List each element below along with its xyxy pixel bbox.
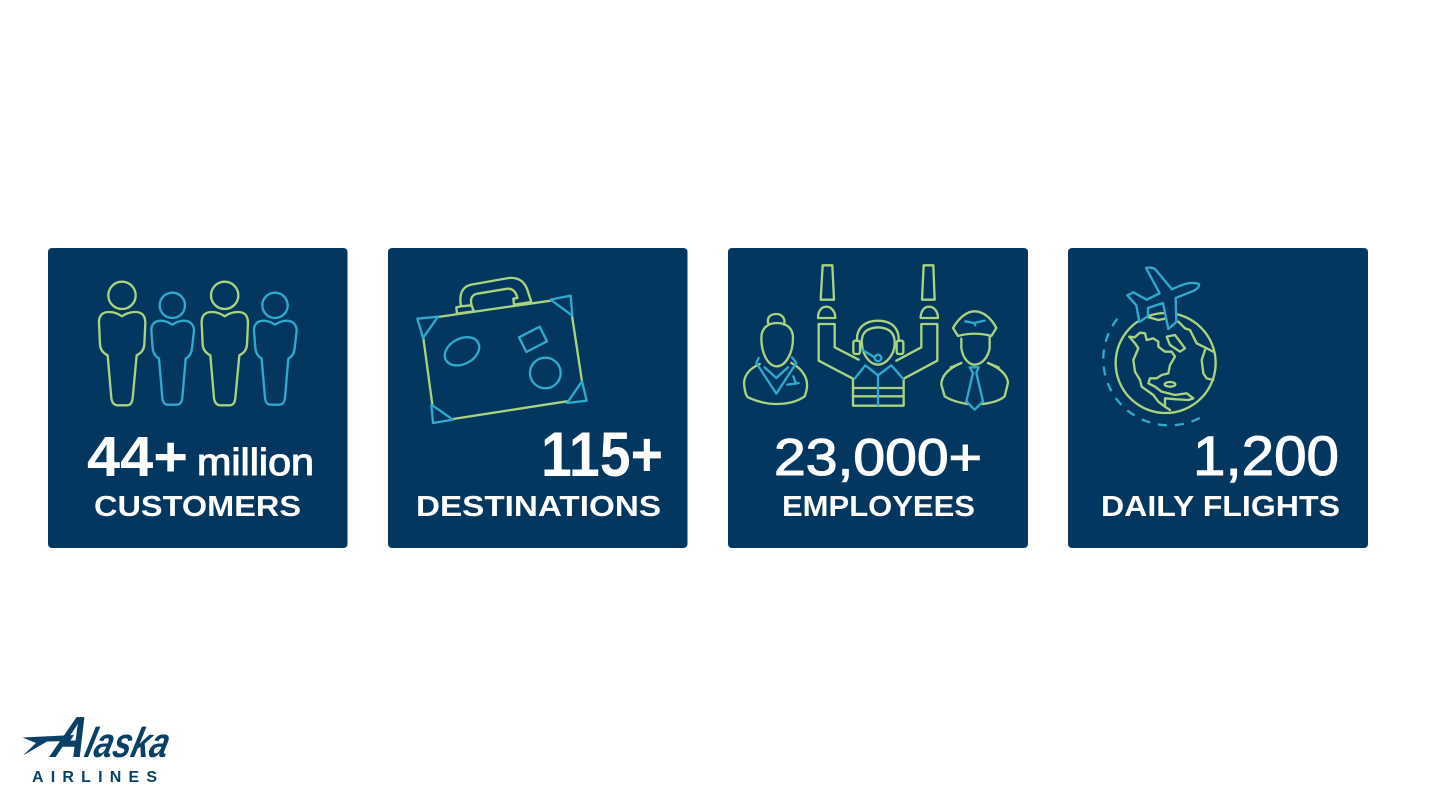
icon: plane over globe <box>1103 268 1216 425</box>
icon: suitcase <box>417 278 587 423</box>
panel: customers <box>48 248 348 548</box>
panel: daily flights <box>1068 248 1368 548</box>
stat: 1,200: 1,200 <box>1193 424 1339 487</box>
logo subtitle: AIRLINES <box>32 769 157 786</box>
stat: 115+: 115+ <box>541 420 663 490</box>
stat: 23,000+: 23,000+ <box>774 429 982 487</box>
stat: 44+ million: 44+ <box>87 425 188 489</box>
label: daily flights: DAILY FLIGHTS <box>1101 491 1340 523</box>
label: customers: CUSTOMERS <box>94 491 301 523</box>
logo swoosh <box>22 735 74 756</box>
stat: 44+ million <box>87 425 314 489</box>
icon: flight attendant, ground marshal, pilot <box>744 265 1008 410</box>
panel: employees <box>728 248 1028 548</box>
logo wordmark: Alaska <box>45 706 179 770</box>
logo: Alaska Airlines <box>22 706 179 786</box>
panel: destinations <box>388 248 688 548</box>
icon: ground marshal <box>818 265 938 406</box>
icon: four people <box>99 282 297 405</box>
label: destinations: DESTINATIONS <box>416 491 661 523</box>
icon: pilot <box>941 311 1008 410</box>
stat: 44+ million: million <box>197 442 314 484</box>
icon: flight attendant <box>744 314 807 404</box>
label: employees: EMPLOYEES <box>782 491 975 523</box>
